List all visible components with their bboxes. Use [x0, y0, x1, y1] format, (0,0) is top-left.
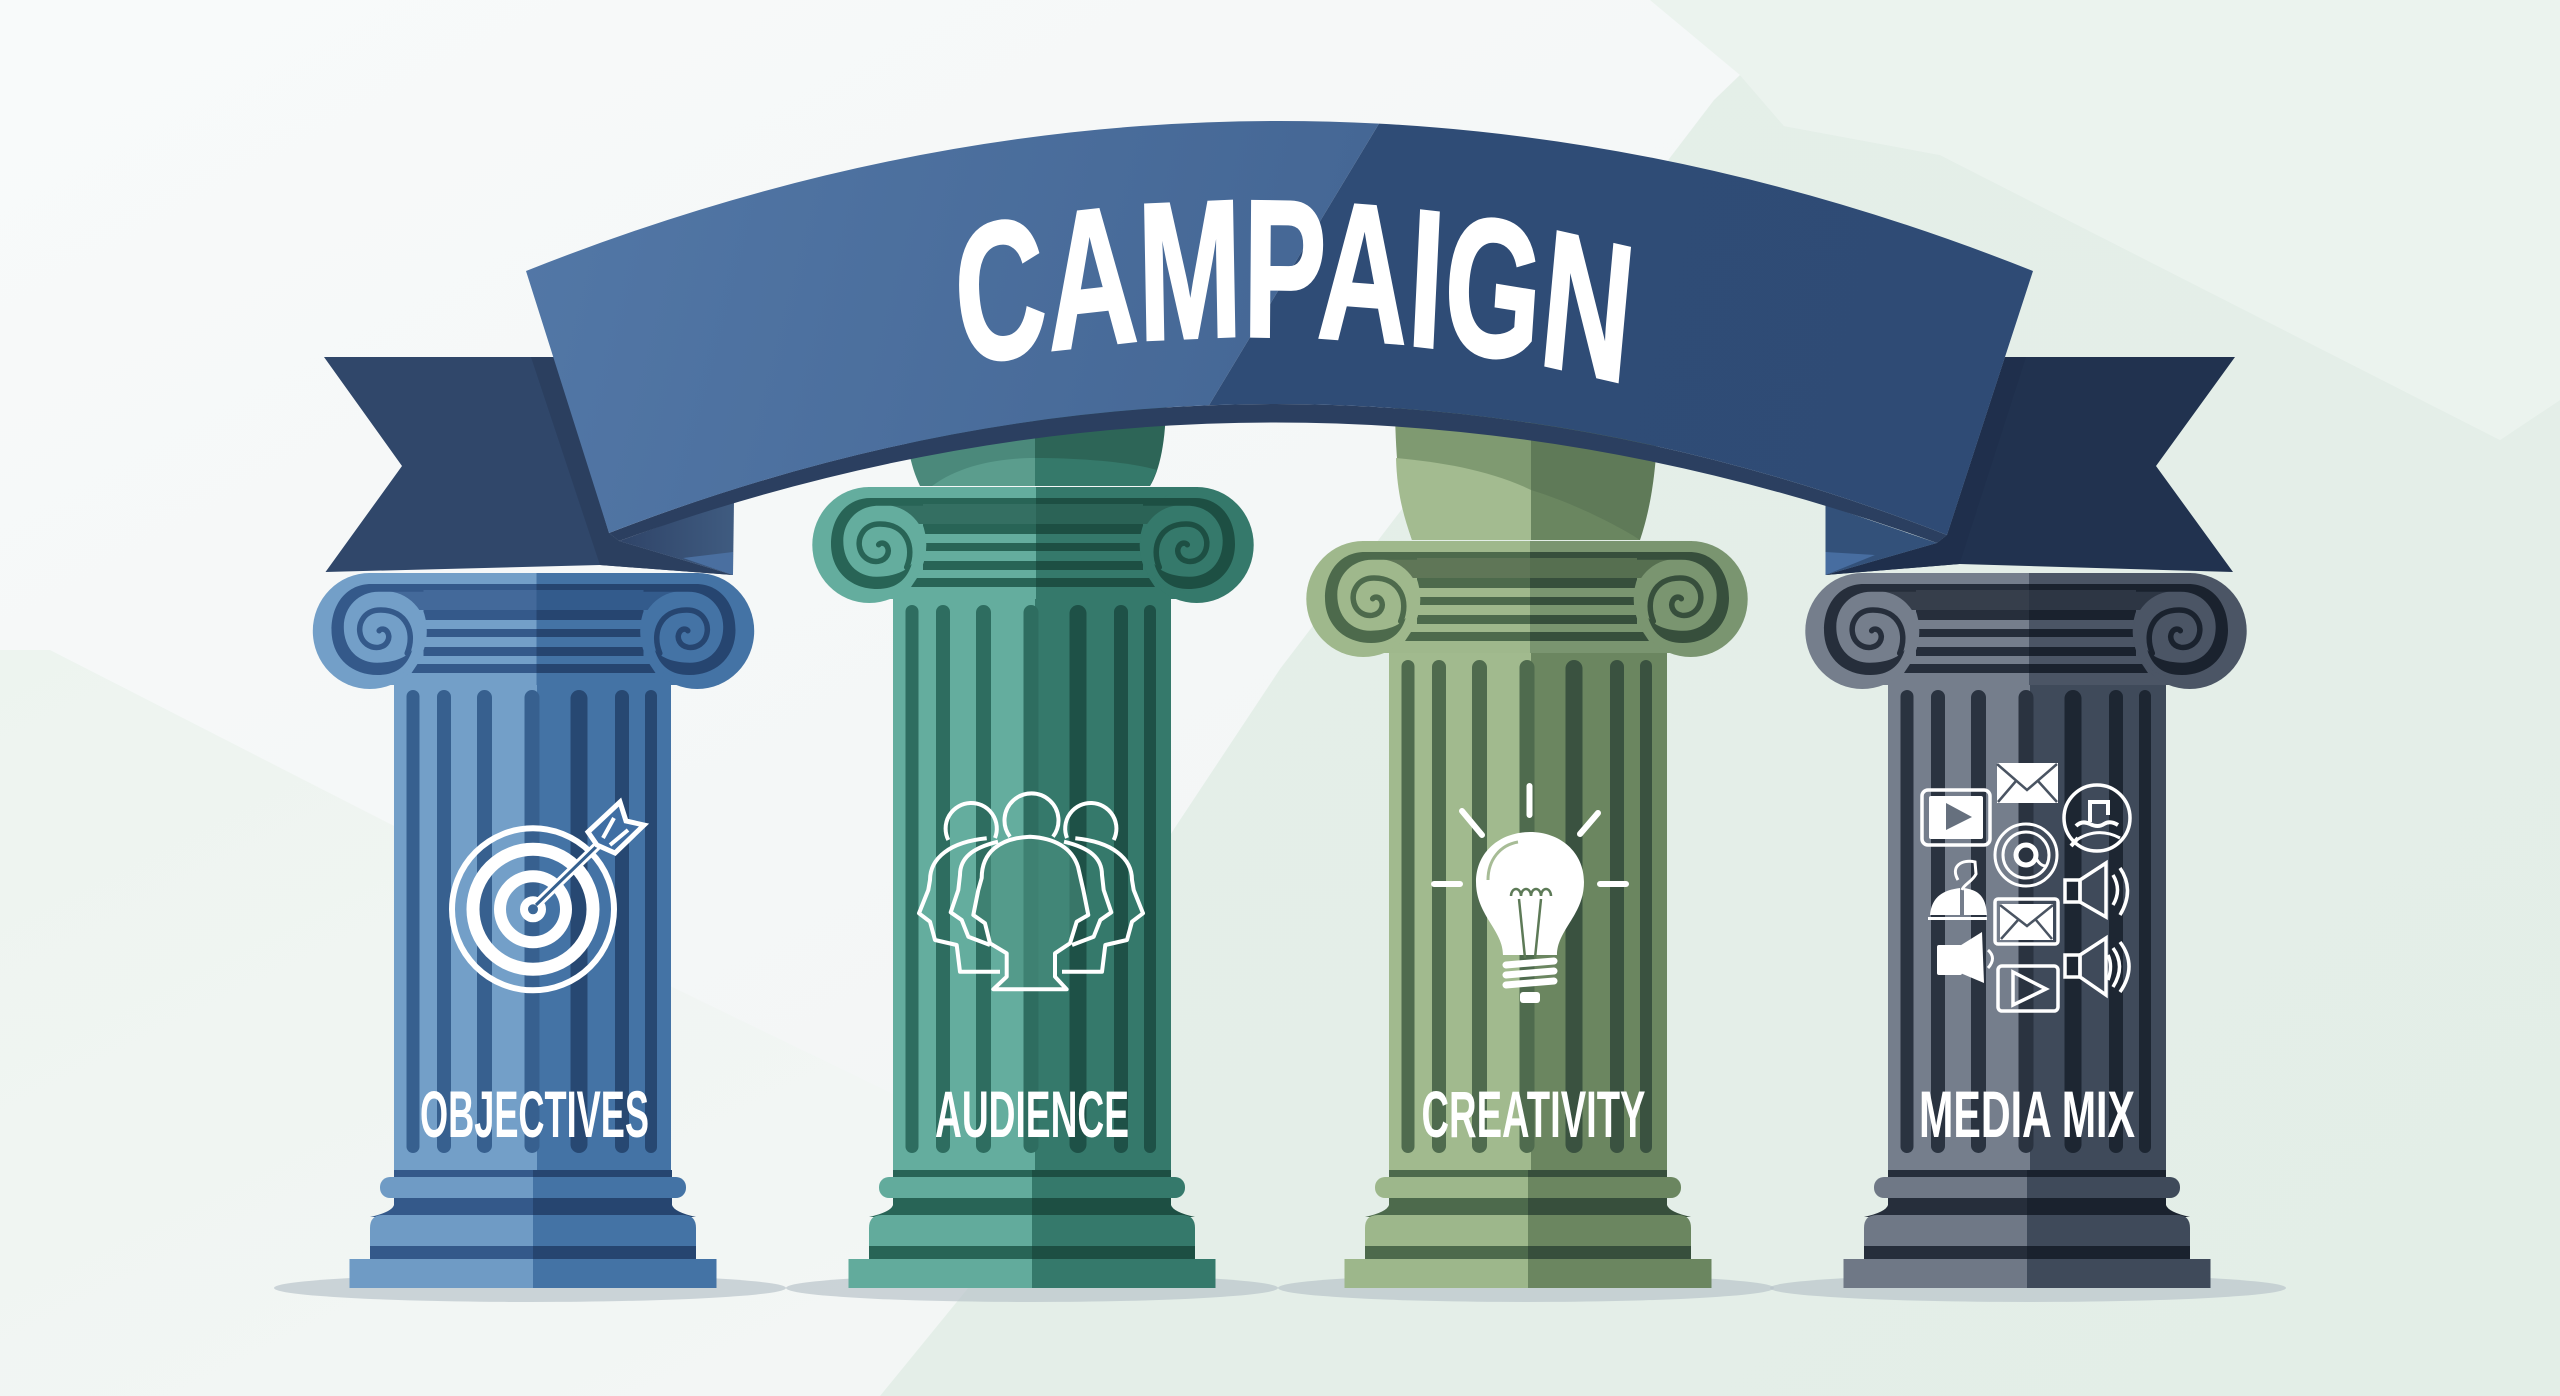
speaker with waves [2065, 938, 2129, 995]
capital [1306, 541, 1748, 657]
play box outlined [1998, 966, 2058, 1011]
play box [1922, 790, 1990, 845]
base [848, 1170, 1216, 1288]
title: CAMPAIGN [959, 200, 1631, 384]
icon: media collage [1922, 763, 2130, 1011]
banner [324, 121, 2235, 575]
pillar: creativity [1306, 400, 1748, 1288]
base [1844, 1170, 2210, 1288]
envelope outlined [1995, 899, 2058, 944]
title [959, 200, 1631, 384]
shaft [394, 665, 671, 1176]
right tail [1826, 357, 2235, 575]
dome [1395, 400, 1658, 540]
pillar: objectives [313, 573, 754, 1288]
capital [313, 573, 754, 689]
pillar: media mix [1805, 573, 2247, 1288]
icon: people group [919, 793, 1143, 989]
banner left face [526, 121, 1379, 533]
base [1344, 1170, 1712, 1288]
at-sign rings [1995, 824, 2057, 886]
envelope [1997, 763, 2058, 803]
label: objectives: OBJECTIVES [420, 1077, 649, 1151]
label: audience: AUDIENCE [935, 1077, 1129, 1151]
shaft [1389, 634, 1667, 1176]
speaker [2065, 863, 2128, 917]
music bubble [2064, 785, 2130, 851]
pillar: audience [812, 400, 1254, 1288]
shaft [1888, 665, 2166, 1176]
left tail [324, 357, 734, 575]
capital [1805, 573, 2247, 689]
solid speaker [1937, 932, 1992, 983]
shaft [893, 580, 1171, 1176]
icon: light bulb [1434, 786, 1626, 1003]
dome [905, 400, 1166, 486]
base [350, 1170, 716, 1288]
capital [812, 487, 1254, 603]
banner right face [1209, 124, 2033, 535]
person [1928, 861, 1987, 920]
banner underside [609, 404, 1947, 543]
label: media mix: MEDIA MIX [1919, 1077, 2135, 1151]
pillar ground shadows [274, 1274, 2286, 1302]
icon: target with arrow [452, 802, 644, 990]
label: creativity: CREATIVITY [1422, 1077, 1646, 1151]
